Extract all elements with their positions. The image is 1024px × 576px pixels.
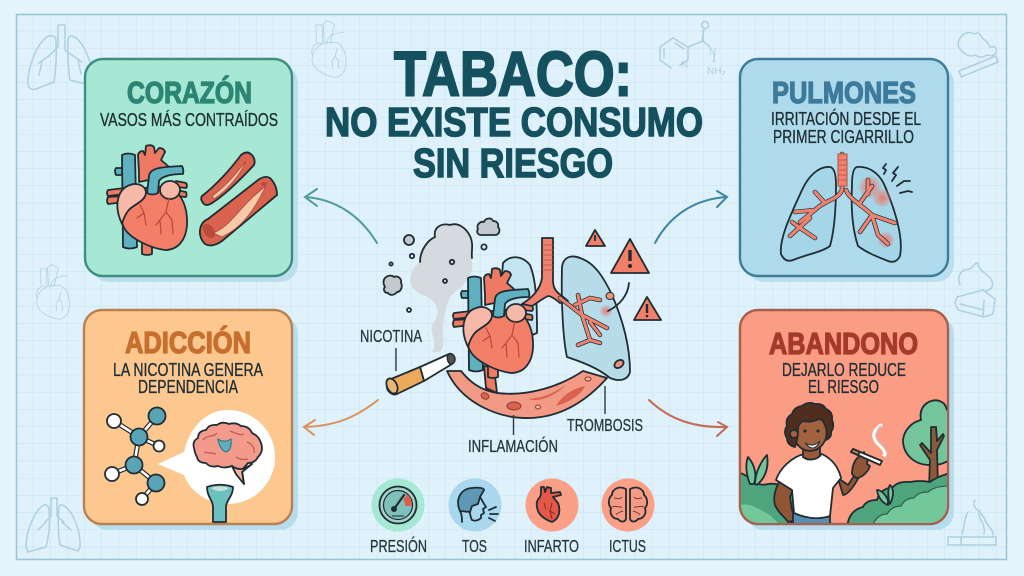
tree <box>903 400 950 487</box>
person <box>774 403 887 530</box>
arrow: to corazón <box>305 189 377 243</box>
arrow: to abandono <box>649 400 727 436</box>
icon: heart <box>107 145 187 255</box>
background icon: ashtray bottom right <box>948 500 996 545</box>
icon: receptor <box>207 485 233 522</box>
heading: adicción: ADICCIÓN <box>125 324 251 360</box>
panel: pulmones <box>740 59 954 282</box>
icon: brain <box>194 423 262 484</box>
icon: ictus <box>602 478 654 532</box>
subtitle: reduce riesgo: DEJARLO REDUCE <box>782 359 906 380</box>
icon: nicotine molecule <box>105 408 166 505</box>
label: nicotina <box>360 326 422 371</box>
subtitle: irritación <box>771 108 921 147</box>
title <box>325 40 703 186</box>
icon: presión <box>372 478 424 532</box>
subtitle: vasos: VASOS MÁS CONTRAÍDOS <box>100 109 278 130</box>
subtitle: reduce riesgo: EL RIESGO <box>808 376 879 397</box>
subtitle: dependencia: LA NICOTINA GENERA <box>113 359 263 380</box>
label: inflamación: INFLAMACIÓN <box>468 435 558 456</box>
background icon: molecule: N <box>681 60 688 71</box>
subtitle: dependencia: DEPENDENCIA <box>138 376 238 397</box>
icon: infarto <box>526 478 578 532</box>
title: TABACO: <box>394 40 632 110</box>
panel: corazón <box>85 59 298 282</box>
label: inflamación <box>468 415 558 456</box>
speech bubble <box>158 410 275 504</box>
title: NO EXISTE CONSUMO <box>325 99 703 145</box>
background icon: molecule <box>660 22 725 77</box>
panel: adicción <box>84 310 298 530</box>
heading: abandono: ABANDONO <box>769 327 918 361</box>
central heart <box>453 268 533 378</box>
subtitle: irritación: IRRITACIÓN DESDE EL <box>771 108 921 129</box>
title: SIN RIESGO <box>413 140 613 186</box>
warning right <box>634 297 661 320</box>
background icon: lungs bottom left <box>26 498 80 552</box>
label: ictus: ICTUS <box>609 536 646 556</box>
lungs <box>500 256 630 380</box>
icon: irritated lungs <box>781 154 912 262</box>
panel: abandono <box>740 310 954 530</box>
arrow: to pulmones <box>655 191 727 243</box>
label: presión: PRESIÓN <box>370 535 427 556</box>
background icon: molecule: NH₂ <box>707 66 725 77</box>
label: nicotina: NICOTINA <box>360 326 422 346</box>
label: tos: TOS <box>462 536 487 556</box>
warning large <box>611 239 649 273</box>
bronchi <box>522 238 607 345</box>
icon: tos <box>448 478 502 532</box>
heading: corazón: CORAZÓN <box>127 74 252 110</box>
background icon: smoke and cigarette top right <box>958 33 998 77</box>
illustration: nature and person <box>740 400 950 530</box>
label: trombosis <box>567 386 643 435</box>
label: trombosis: TROMBOSIS <box>567 415 643 435</box>
central illustration <box>360 218 661 456</box>
warning top <box>586 230 605 246</box>
smoke <box>384 218 499 352</box>
background icon: lungs top left <box>28 25 94 90</box>
cigarette <box>384 354 455 395</box>
label: infarto: INFARTO <box>524 536 579 556</box>
background icon: heart left <box>37 265 70 319</box>
subtitle: dependencia <box>113 359 263 397</box>
artery <box>447 366 607 418</box>
icon: narrowed vessels <box>200 152 277 245</box>
background icon: heart top <box>312 21 346 77</box>
heading: pulmones: PULMONES <box>772 76 916 110</box>
background icon: molecule: N <box>709 47 716 58</box>
subtitle: reduce riesgo <box>782 359 906 397</box>
bushes <box>740 455 950 530</box>
arrow: to adicción <box>304 400 378 435</box>
subtitle: irritación: PRIMER CIGARRILLO <box>773 126 914 147</box>
background icon: smoke and pack right <box>955 263 995 317</box>
